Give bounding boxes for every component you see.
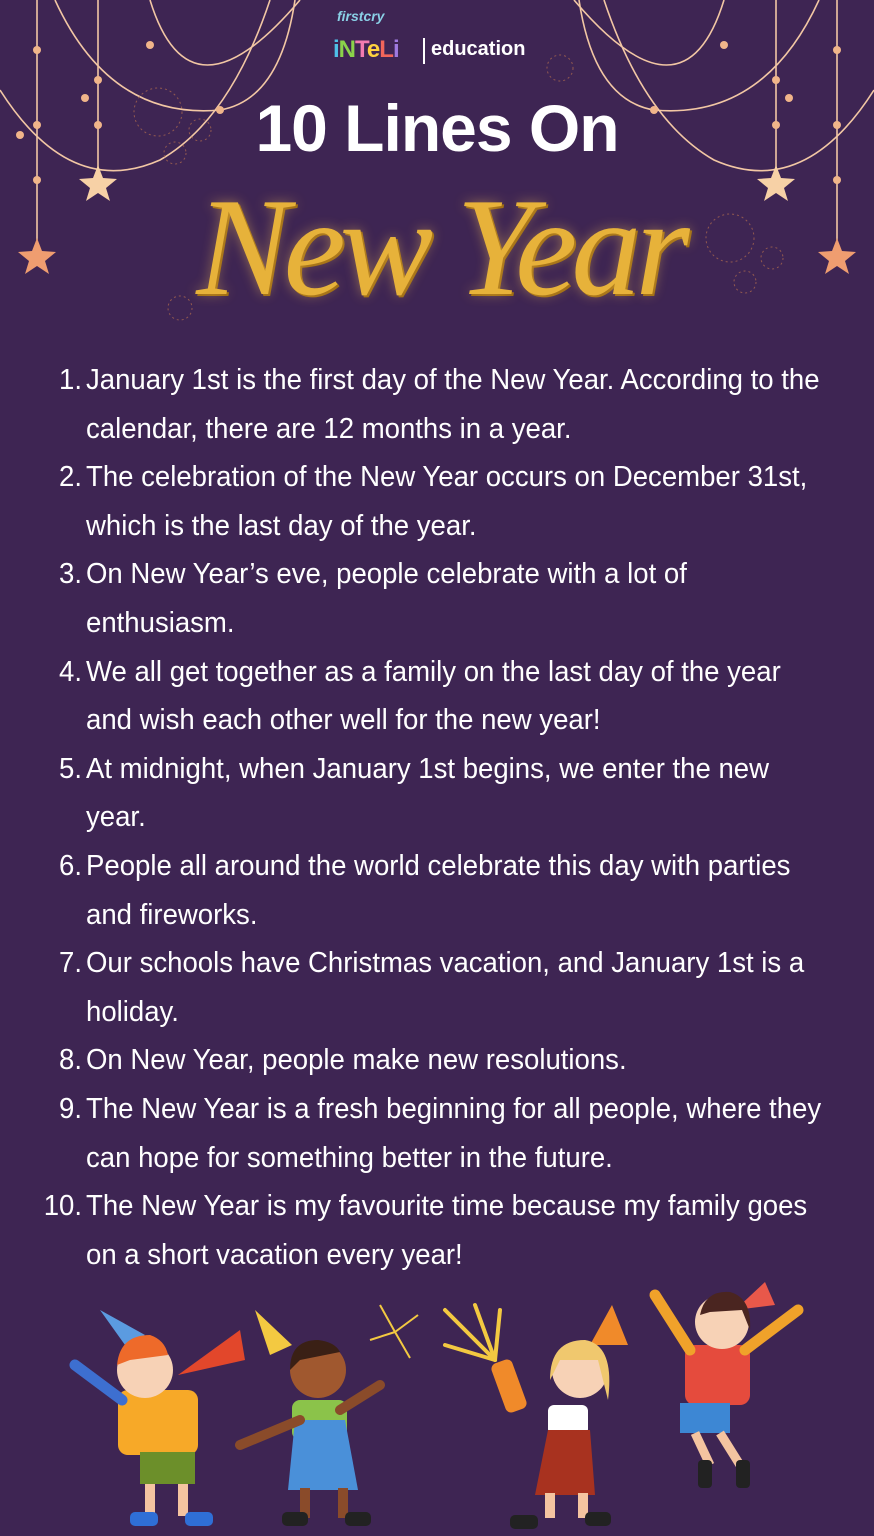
- list of 10 lines: and fireworks.: [86, 899, 257, 931]
- list of 10 lines: The celebration of the New Year occurs on December 31st,: [86, 461, 807, 493]
- kid 4: [655, 1282, 798, 1488]
- logo: [333, 8, 525, 64]
- list of 10 lines: 1.: [59, 364, 82, 396]
- list of 10 lines: enthusiasm.: [86, 607, 235, 639]
- list of 10 lines: The New Year is a fresh beginning for all people, where they: [86, 1093, 821, 1125]
- kid 3: [445, 1305, 628, 1529]
- list of 10 lines: We all get together as a family on the last day of the year: [86, 656, 781, 688]
- list of 10 lines: January 1st is the first day of the New Year. According to the: [86, 364, 820, 396]
- list of 10 lines: on a short vacation every year!: [86, 1239, 463, 1271]
- title: New Year script: New Year: [196, 170, 684, 325]
- logo: education: [431, 38, 525, 60]
- illustration: celebrating kids: [70, 1282, 804, 1529]
- logo: firstcry: [337, 8, 384, 24]
- list of 10 lines: calendar, there are 12 months in a year.: [86, 413, 571, 445]
- list of 10 lines: 6.: [59, 850, 82, 882]
- list of 10 lines: 7.: [59, 947, 82, 979]
- title: 10 Lines On: 10 Lines On: [255, 91, 619, 165]
- list of 10 lines: 2.: [59, 461, 82, 493]
- list of 10 lines: Our schools have Christmas vacation, and January 1st is a: [86, 947, 804, 979]
- list of 10 lines: 10.: [44, 1190, 82, 1222]
- decorative header svg: garlands, stars, fireworks: [0, 0, 874, 320]
- list of 10 lines: can hope for something better in the future.: [86, 1142, 613, 1174]
- logo: iNTeLi: [333, 36, 399, 63]
- list of 10 lines: At midnight, when January 1st begins, we enter the new: [86, 753, 769, 785]
- list of 10 lines: and wish each other well for the new year!: [86, 704, 601, 736]
- list of 10 lines: 3.: [59, 558, 82, 590]
- kid 2: [240, 1305, 418, 1526]
- list of 10 lines: holiday.: [86, 996, 179, 1028]
- list of 10 lines: 4.: [59, 656, 82, 688]
- list of 10 lines: The New Year is my favourite time because my family goes: [86, 1190, 807, 1222]
- list of 10 lines: 5.: [59, 753, 82, 785]
- kid 1: [75, 1310, 245, 1526]
- list of 10 lines: People all around the world celebrate this day with parties: [86, 850, 790, 882]
- list of 10 lines: which is the last day of the year.: [86, 510, 477, 542]
- list of 10 lines: 8.: [59, 1044, 82, 1076]
- list of 10 lines: On New Year, people make new resolutions.: [86, 1044, 627, 1076]
- list of 10 lines: On New Year’s eve, people celebrate with a lot of: [86, 558, 687, 590]
- list of 10 lines: year.: [86, 801, 146, 833]
- list of 10 lines: [44, 364, 822, 1271]
- list of 10 lines: 9.: [59, 1093, 82, 1125]
